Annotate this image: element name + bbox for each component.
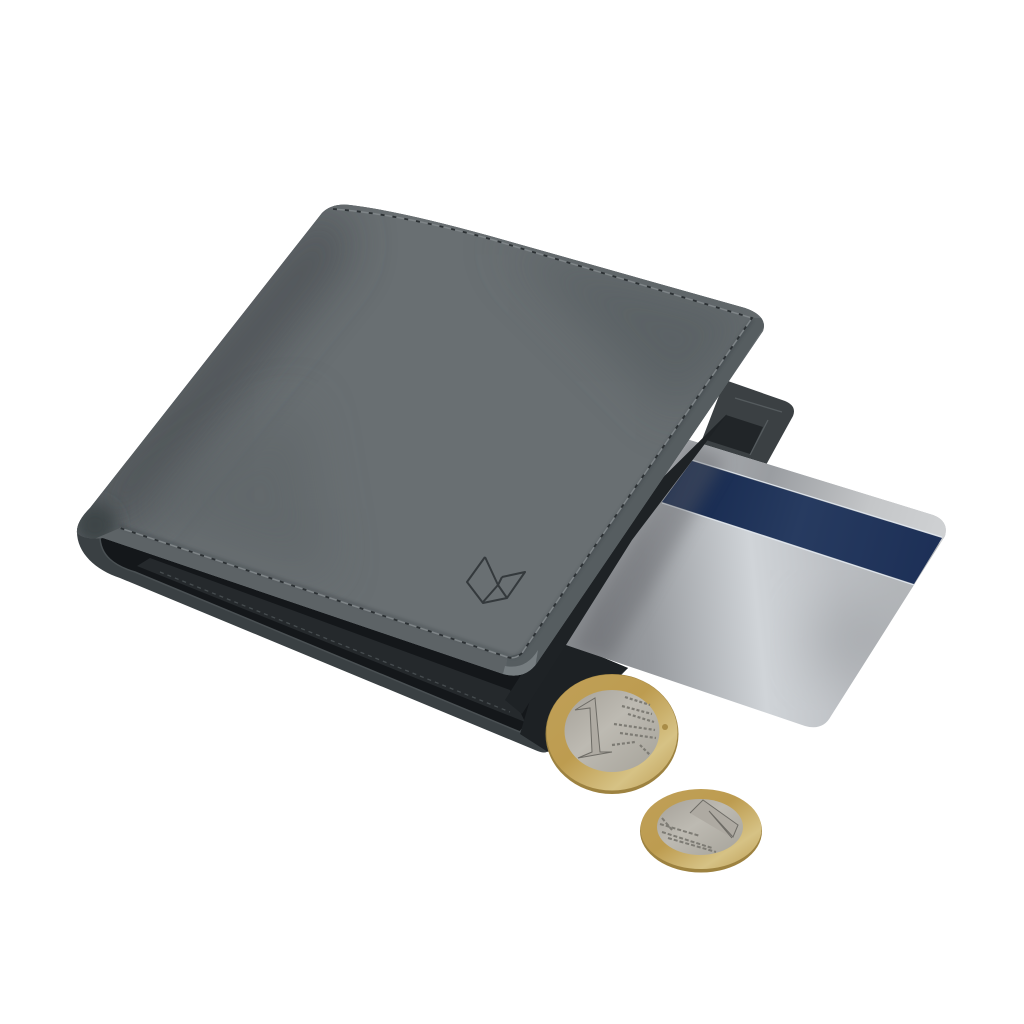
rear pocket inner lining [706,415,763,454]
numeral one [690,800,738,838]
rear pocket top corner [700,380,794,465]
stitch shadow [120,320,752,657]
flap outer edge [77,205,764,676]
wallet back section [77,380,794,752]
wallet lower body [77,400,628,752]
map of Europe [612,697,656,755]
map of Europe [660,818,716,852]
flap surface [60,190,780,690]
numeral one [575,698,612,758]
lower-right shade on card [815,605,905,675]
surface shading [60,200,350,530]
inner pocket panel [137,558,525,722]
left corner shade [76,500,120,538]
icon: embossed logo [467,557,525,603]
shadow from wallet on card [570,440,725,660]
dark strip beside flap [505,414,727,714]
card upper band [670,437,950,545]
magnetic stripe [662,461,942,584]
card body [566,440,946,728]
coin gold ring [640,789,762,869]
coin silver centre [564,690,660,772]
coin edge [546,674,678,794]
wallet front flap [60,190,780,690]
coin gold ring [546,674,678,790]
credit card [566,440,946,728]
small coin [640,789,762,872]
coin silver centre [657,799,743,855]
rim shading right and bottom [505,318,770,682]
pocket fold at bottom right [520,642,628,752]
coin edge [640,790,762,872]
stitching [120,209,752,658]
wallet inner black opening [100,536,560,732]
large coin [546,674,678,794]
product illustration: wallet with card and coins [76,204,946,872]
